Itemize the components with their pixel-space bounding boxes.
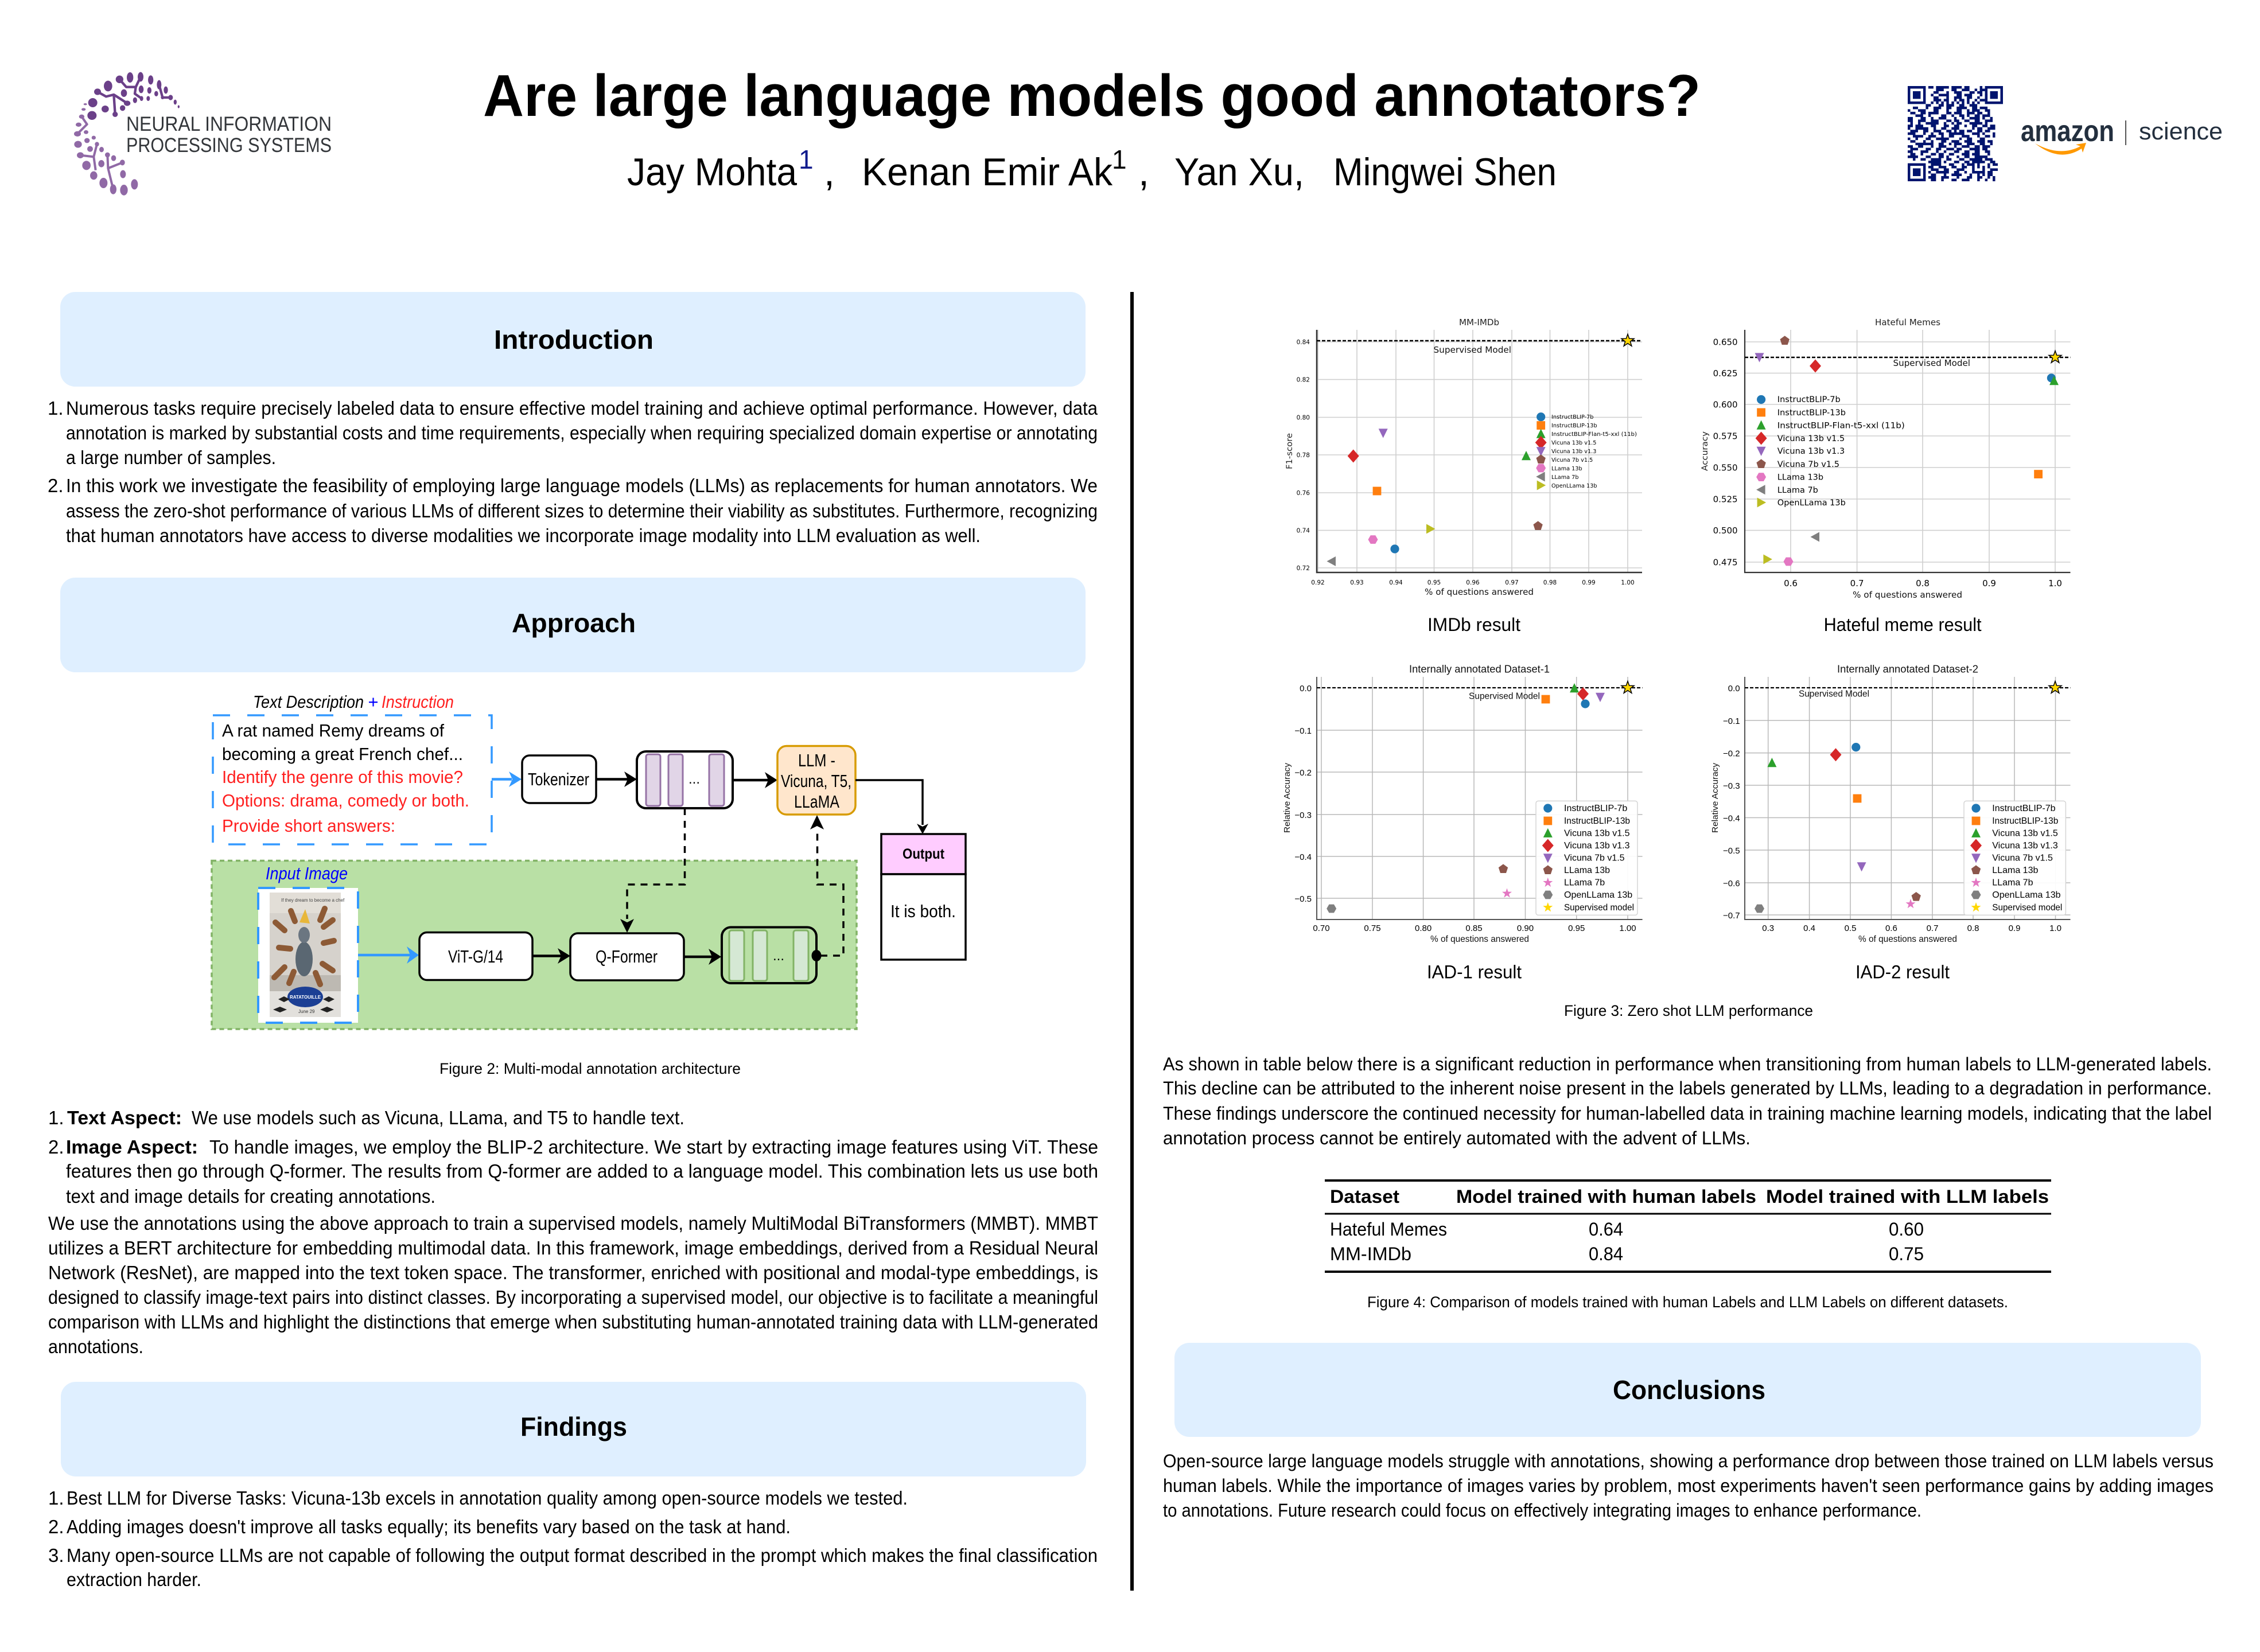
y tick labels: −0.7 <box>1723 911 1740 921</box>
dashed prompt box <box>213 715 492 844</box>
legend: InstructBLIP-13b <box>1992 816 2058 826</box>
input image: movie poster <box>258 888 358 1023</box>
x tick labels: 0.6 <box>1784 578 1798 589</box>
input image: movie poster: RATATOUILLE <box>290 994 321 1000</box>
y tick labels: 0.78 <box>1297 452 1310 459</box>
text block: supervised model paragraph <box>48 1213 1098 1357</box>
purple token embeddings: ... <box>688 772 700 787</box>
y tick labels: 0.500 <box>1713 525 1738 536</box>
data points <box>1327 334 1634 566</box>
axis labels: % of questions answered <box>1853 590 1962 600</box>
legend: InstructBLIP-13b <box>1777 408 1846 418</box>
x tick labels: 0.9 <box>2009 924 2020 933</box>
x tick labels: 0.4 <box>1803 924 1815 933</box>
text block: supervised model paragraph: We use the annotations using the above approach to train a supervised models, namely MultiModal BiTransformers (MMBT). MMBT <box>48 1213 1098 1234</box>
text block: introduction list: that human annotators have access to diverse modalities we incorporate image modality into LLM evaluation as well. <box>66 525 981 546</box>
y tick labels: 0.0 <box>1300 684 1312 693</box>
legend: Vicuna 13b v1.3 <box>1551 449 1596 455</box>
y tick labels: 0.475 <box>1713 558 1738 568</box>
text block: supervised model paragraph: annotations. <box>48 1336 143 1357</box>
authors: 1 <box>799 145 814 174</box>
text description heading: + <box>368 692 378 712</box>
arrow: ViT to Q-Former <box>532 948 570 964</box>
y tick labels: 0.76 <box>1297 490 1310 497</box>
x tick labels: 0.7 <box>1927 924 1938 933</box>
logo: amazon science: science <box>2139 118 2223 145</box>
supervised reference line: Supervised Model <box>1433 345 1511 355</box>
axis labels <box>1282 762 1529 944</box>
chart: MM-IMDb scatter <box>1285 317 1642 597</box>
table: human labels vs LLM labels: Hateful Memes <box>1330 1219 1447 1240</box>
x tick labels: 0.95 <box>1568 924 1585 933</box>
x tick labels: 0.6 <box>1885 924 1897 933</box>
legend <box>1964 801 2065 915</box>
logo wordmark: NEURAL INFORMATION <box>126 113 332 135</box>
authors: Jay Mohta <box>627 150 797 194</box>
output box: It is both. <box>890 901 956 921</box>
x tick labels: 0.8 <box>1967 924 1979 933</box>
table: human labels vs LLM labels: 0.60 <box>1889 1219 1924 1240</box>
legend: OpenLLama 13b <box>1992 890 2061 900</box>
y tick labels <box>1294 684 1312 904</box>
x tick labels: 0.95 <box>1427 579 1441 586</box>
axis labels <box>1701 431 1962 600</box>
output box <box>881 834 966 960</box>
legend <box>1756 395 1905 508</box>
x tick labels: 0.75 <box>1364 924 1381 933</box>
y tick labels: −0.4 <box>1723 813 1740 824</box>
axis labels: Relative Accuracy <box>1710 762 1720 833</box>
text block: introduction list: In this work we investigate the feasibility of employing large language models (LLMs) as replacements for human annotators. We <box>66 475 1098 496</box>
axes <box>1317 330 1642 572</box>
x tick labels <box>1313 924 1636 933</box>
x tick labels <box>1762 924 2061 933</box>
table: human labels vs LLM labels: Model trained with LLM labels <box>1766 1186 2049 1207</box>
x tick labels: 0.93 <box>1350 579 1364 586</box>
green image branch panel <box>212 860 857 1029</box>
legend <box>1535 412 1637 490</box>
Q-Former box: Q-Former <box>596 946 658 967</box>
output box: Output <box>903 846 945 862</box>
caption: figure 2: Figure 2: Multi-modal annotation architecture <box>439 1060 741 1077</box>
x tick labels: 1.0 <box>2049 924 2061 933</box>
caption: figure 3: Figure 3: Zero shot LLM performance <box>1564 1002 1813 1019</box>
legend: Vicuna 13b v1.3 <box>1564 841 1630 851</box>
y tick labels: 0.575 <box>1713 431 1738 442</box>
arrow: LLM to output <box>855 780 928 834</box>
Q-Former box <box>570 933 684 980</box>
heading: Approach <box>60 578 1086 672</box>
dashed arrow: image embeddings to LLM <box>810 815 843 961</box>
table: human labels vs LLM labels: 0.84 <box>1589 1244 1623 1264</box>
legend: Supervised model <box>1564 903 1634 913</box>
arrow: tokenizer to embeddings <box>596 772 637 787</box>
text block: findings list: Best LLM for Diverse Tasks: Vicuna-13b excels in annotation quality among open-source models we tested. <box>67 1487 908 1509</box>
x tick labels: 0.9 <box>1982 578 1996 589</box>
x tick labels: 0.97 <box>1505 579 1519 586</box>
text block: introduction list <box>48 398 1098 546</box>
chart title: Internally annotated Dataset-1 <box>1409 663 1550 675</box>
y tick labels: 0.72 <box>1297 565 1310 572</box>
heading: Approach: Approach <box>512 608 636 638</box>
y tick labels: 0.80 <box>1297 414 1310 421</box>
text block: findings list: Adding images doesn't improve all tasks equally; its benefits vary based on the task at hand. <box>67 1516 791 1537</box>
dashed prompt box: becoming a great French chef... <box>222 744 463 764</box>
y tick labels <box>1723 684 1740 921</box>
legend: InstructBLIP-7b <box>1551 414 1593 420</box>
arrow: embeddings to LLM <box>733 772 777 788</box>
axis labels: F1-score <box>1285 433 1294 469</box>
text block: approach list: 2. <box>48 1136 64 1158</box>
dashed arrow: tokens to Q-Former <box>620 808 685 933</box>
text block: approach list: We use models such as Vicuna, LLama, and T5 to handle text. <box>192 1107 684 1128</box>
x tick labels: 0.99 <box>1582 579 1596 586</box>
legend: LLama 7b <box>1992 878 2033 888</box>
text block: approach list: To handle images, we employ the BLIP-2 architecture. We start by extracting image features using ViT. These <box>209 1136 1098 1158</box>
chart title: Internally annotated Dataset-2 <box>1837 663 1978 675</box>
logo wordmark: PROCESSING SYSTEMS <box>126 134 332 157</box>
LLM box: Vicuna, T5, <box>781 771 851 791</box>
logo: amazon science <box>2021 115 2223 155</box>
x tick labels: 0.85 <box>1465 924 1483 933</box>
input image: movie poster: June 29 <box>298 1009 315 1014</box>
text block: introduction list: 1. <box>48 398 64 419</box>
y tick labels: −0.5 <box>1294 894 1312 904</box>
x tick labels <box>1311 579 1635 586</box>
text block: table discussion: This decline can be attributed to the inherent noise present in the labels generated by LLMs, leading to a degradation in performance. <box>1163 1078 2212 1098</box>
legend: InstructBLIP-7b <box>1992 804 2056 813</box>
legend: InstructBLIP-13b <box>1564 816 1630 826</box>
axes <box>1745 677 2070 919</box>
logo wordmark <box>126 113 332 157</box>
x tick labels: 0.98 <box>1543 579 1557 586</box>
grid lines <box>1317 677 1643 919</box>
legend: Vicuna 7b v1.5 <box>1777 460 1839 469</box>
legend: Vicuna 7b v1.5 <box>1992 854 2053 863</box>
arrow: Q-Former to image embeddings <box>684 949 721 965</box>
axis labels: Relative Accuracy <box>1282 762 1292 833</box>
y tick labels: −0.6 <box>1723 879 1740 889</box>
legend: Vicuna 7b v1.5 <box>1551 457 1593 463</box>
text block: supervised model paragraph: utilizes a BERT architecture for embedding multimodal data. In this framework, image embeddings, derived from a Residual Neural <box>48 1237 1098 1259</box>
logo: amazon science: amazon <box>2021 115 2114 148</box>
LLM box: LLaMA <box>794 792 839 812</box>
heading: Introduction: Introduction <box>494 325 654 354</box>
dashed prompt box: A rat named Remy dreams of <box>222 720 444 741</box>
y tick labels: −0.3 <box>1723 781 1740 791</box>
legend: InstructBLIP-7b <box>1777 395 1841 404</box>
text block: introduction list: Numerous tasks require precisely labeled data to ensure effective model training and achieve optimal performance. However, data <box>66 398 1098 419</box>
axis labels: % of questions answered <box>1430 934 1529 944</box>
axis labels: Accuracy <box>1701 431 1710 471</box>
authors <box>627 145 1557 194</box>
text block: findings list: 3. <box>48 1545 64 1566</box>
y tick labels: 0.74 <box>1297 528 1310 535</box>
text block: table discussion <box>1163 1054 2212 1148</box>
purple token embeddings <box>637 751 733 808</box>
input image label: Input Image <box>266 863 348 883</box>
dashed prompt box: Provide short answers: <box>222 816 395 836</box>
chart title: Hateful Memes <box>1875 317 1940 328</box>
legend: LLama 13b <box>1551 466 1582 472</box>
axis labels <box>1285 433 1534 597</box>
y tick labels: 0.600 <box>1713 399 1738 410</box>
x tick labels: 1.00 <box>1619 924 1636 933</box>
legend: OpenLLama 13b <box>1551 483 1597 489</box>
legend: Vicuna 13b v1.5 <box>1564 828 1630 839</box>
caption: figure 4: Figure 4: Comparison of models trained with human Labels and LLM Labels on different datasets. <box>1367 1293 2008 1311</box>
legend: LLama 13b <box>1992 866 2038 875</box>
x tick labels <box>1784 578 2062 589</box>
legend: InstructBLIP-Flan-t5-xxl (11b) <box>1777 421 1905 430</box>
table: human labels vs LLM labels: 0.64 <box>1589 1219 1623 1240</box>
grid lines <box>1745 330 2070 572</box>
text block: supervised model paragraph: Network (ResNet), are mapped into the text token space. The transformer, enriched with positional and modal-type embeddings, is <box>48 1262 1098 1283</box>
text block: conclusions: human labels. While the importance of images varies by problem, most experiments haven't seen performance gains by adding images <box>1163 1475 2214 1496</box>
text block: conclusions: to annotations. Future research could focus on effectively integrating images to enhance performance. <box>1163 1500 1921 1521</box>
legend: InstructBLIP-7b <box>1564 804 1627 813</box>
text block: table discussion: These findings underscore the continued necessity for human-labelled data in training machine learning models, indicating that the label <box>1163 1103 2212 1124</box>
chart: Internally annotated Dataset-2 scatter <box>1710 663 2070 944</box>
authors: , <box>1138 150 1149 194</box>
y tick labels: 0.625 <box>1713 368 1738 379</box>
text block: table discussion: annotation process cannot be entirely automated with the advent of LLMs. <box>1163 1128 1751 1148</box>
legend: InstructBLIP-Flan-t5-xxl (11b) <box>1551 431 1637 438</box>
legend: Vicuna 7b v1.5 <box>1564 854 1625 863</box>
text block: findings list: 2. <box>48 1516 64 1537</box>
y tick labels <box>1297 339 1310 572</box>
legend: LLama 13b <box>1564 866 1610 875</box>
caption: Hateful meme result: Hateful meme result <box>1824 614 1982 635</box>
supervised reference line: Supervised Model <box>1893 358 1970 368</box>
legend: LLama 7b <box>1777 486 1818 495</box>
ViT-G/14 box <box>419 933 532 980</box>
text block: approach list: text and image details for creating annotations. <box>66 1186 435 1207</box>
y tick labels: −0.1 <box>1294 726 1312 736</box>
y tick labels: 0.82 <box>1297 376 1310 383</box>
legend: Vicuna 13b v1.5 <box>1992 828 2058 839</box>
text block: approach list: 1. <box>48 1107 64 1128</box>
authors: Yan Xu, <box>1174 150 1304 194</box>
text block: findings list <box>48 1487 1098 1590</box>
x tick labels: 0.94 <box>1389 579 1403 586</box>
heading: Findings: Findings <box>520 1412 627 1441</box>
tokenizer box: Tokenizer <box>528 769 589 789</box>
figure 2: multi-modal annotation architecture diagram <box>212 692 966 1029</box>
y tick labels: −0.2 <box>1723 749 1740 759</box>
x tick labels: 0.8 <box>1916 578 1930 589</box>
chart: Hateful Memes scatter <box>1701 317 2070 600</box>
y tick labels: −0.1 <box>1723 716 1740 726</box>
text block: findings list: extraction harder. <box>67 1569 201 1590</box>
grid lines <box>1745 677 2070 919</box>
legend <box>1536 801 1637 915</box>
legend: OpenLLama 13b <box>1564 890 1632 900</box>
icon: NeurIPS dot swirl <box>74 72 180 196</box>
LLM box: LLM - <box>798 750 835 770</box>
axis labels: % of questions answered <box>1858 934 1957 944</box>
x tick labels: 0.3 <box>1762 924 1774 933</box>
y tick labels <box>1713 337 1738 568</box>
text block: introduction list: a large number of samples. <box>66 447 276 468</box>
LLM box <box>777 746 855 815</box>
x tick labels: 0.70 <box>1313 924 1330 933</box>
y tick labels: 0.84 <box>1297 339 1310 346</box>
QR code <box>1908 86 2003 181</box>
x tick labels: 0.92 <box>1311 579 1325 586</box>
text block: introduction list: 2. <box>48 475 64 496</box>
axes <box>1745 330 2070 572</box>
table: human labels vs LLM labels <box>1325 1179 2051 1273</box>
legend: Supervised model <box>1992 903 2062 913</box>
x tick labels: 1.0 <box>2048 578 2062 589</box>
green image embeddings: ... <box>773 948 784 964</box>
logo: Neural Information Processing Systems <box>74 72 332 196</box>
text description heading: Instruction <box>382 692 454 712</box>
authors: Kenan Emir Ak <box>862 150 1113 194</box>
legend: LLama 7b <box>1551 474 1579 481</box>
y tick labels: 0.650 <box>1713 337 1738 348</box>
supervised reference line: Supervised Model <box>1469 692 1540 701</box>
axis labels <box>1710 762 1957 944</box>
y tick labels: −0.4 <box>1294 852 1312 862</box>
title: Are large language models good annotators? <box>483 63 1701 128</box>
text block: introduction list: annotation is marked by substantial costs and time requirements, especially when requiring specialized domain expertise or annotating <box>66 422 1098 443</box>
axes <box>1317 677 1643 919</box>
x tick labels: 0.7 <box>1850 578 1864 589</box>
x tick labels: 0.90 <box>1517 924 1534 933</box>
legend: OpenLLama 13b <box>1777 498 1846 508</box>
caption: IAD-1 result: IAD-1 result <box>1427 962 1522 983</box>
text block: introduction list: assess the zero-shot performance of various LLMs of different sizes to determine their viability as substitutes. Furthermore, recognizing <box>66 500 1098 521</box>
text block: supervised model paragraph: designed to classify image-text pairs into distinct classes. By incorporating a supervised model, our objective is to facilitate a meaningful <box>48 1287 1098 1308</box>
text block: findings list: 1. <box>48 1487 64 1509</box>
text block: approach list: Image Aspect: <box>66 1136 198 1158</box>
legend: LLama 13b <box>1777 473 1823 482</box>
authors: , <box>824 150 835 194</box>
green image embeddings <box>722 927 816 983</box>
caption: IMDb result: IMDb result <box>1427 614 1520 635</box>
legend: Vicuna 13b v1.3 <box>1777 447 1845 456</box>
text block: conclusions: Open-source large language models struggle with annotations, showing a performance drop between those trained on LLM labels versus <box>1163 1451 2214 1471</box>
legend: InstructBLIP-13b <box>1551 423 1597 429</box>
text description heading <box>253 692 454 712</box>
legend: LLama 7b <box>1564 878 1605 888</box>
y tick labels: 0.525 <box>1713 494 1738 505</box>
table: human labels vs LLM labels: Dataset <box>1330 1186 1399 1207</box>
heading: Introduction <box>60 292 1086 387</box>
text block: approach list: Text Aspect: <box>67 1107 182 1128</box>
text block: findings list: Many open-source LLMs are not capable of following the output format described in the prompt which makes the final classification <box>67 1545 1098 1566</box>
y tick labels: −0.2 <box>1294 768 1312 778</box>
x tick labels: 0.80 <box>1415 924 1432 933</box>
text block: conclusions <box>1163 1451 2214 1521</box>
dashed prompt box: Identify the genre of this movie? <box>222 767 463 787</box>
text block: approach list: features then go through Q-former. The results from Q-former are added to a language model. This combination lets us use both <box>66 1160 1098 1182</box>
table: human labels vs LLM labels: MM-IMDb <box>1330 1244 1411 1264</box>
text block: approach list <box>48 1107 1098 1207</box>
authors: Mingwei Shen <box>1333 150 1557 194</box>
divider: column separator <box>1130 292 1134 1591</box>
axis labels: % of questions answered <box>1425 587 1534 597</box>
chart title: MM-IMDb <box>1459 317 1499 328</box>
tokenizer box <box>522 755 596 803</box>
heading: Conclusions: Conclusions <box>1613 1375 1765 1405</box>
ViT-G/14 box: ViT-G/14 <box>448 946 503 967</box>
arrow: image to ViT <box>358 946 419 964</box>
table: human labels vs LLM labels: Model trained with human labels <box>1456 1186 1756 1207</box>
grid lines <box>1317 330 1642 572</box>
arrow: prompt to tokenizer <box>492 772 522 787</box>
legend: Vicuna 13b v1.5 <box>1777 434 1845 443</box>
x tick labels: 0.5 <box>1845 924 1856 933</box>
text block: supervised model paragraph: comparison with LLMs and highlight the distinctions that emerge when substituting human-annotated training data with LLM-generated <box>48 1311 1098 1332</box>
x tick labels: 1.00 <box>1621 579 1635 586</box>
authors: 1 <box>1112 145 1127 174</box>
dashed prompt box: Options: drama, comedy or both. <box>222 790 469 811</box>
heading: Findings <box>61 1382 1086 1476</box>
y tick labels: 0.550 <box>1713 462 1738 473</box>
input image: movie poster: If they dream to become a chef <box>281 898 345 903</box>
supervised reference line: Supervised Model <box>1799 689 1869 699</box>
text block: table discussion: As shown in table below there is a significant reduction in performance when transitioning from human labels to LLM-generated labels. <box>1163 1054 2212 1074</box>
y tick labels: 0.0 <box>1728 684 1740 693</box>
chart: Internally annotated Dataset-1 scatter <box>1282 663 1643 944</box>
legend: Vicuna 13b v1.3 <box>1992 841 2058 851</box>
x tick labels: 0.96 <box>1466 579 1480 586</box>
text description heading: Text Description <box>253 692 364 712</box>
data points <box>1755 336 2061 566</box>
caption: IAD-2 result: IAD-2 result <box>1856 962 1950 983</box>
heading: Conclusions <box>1174 1343 2201 1437</box>
y tick labels: −0.5 <box>1723 846 1740 856</box>
data points <box>1327 681 1634 913</box>
table: human labels vs LLM labels: 0.75 <box>1889 1244 1924 1264</box>
data points <box>1755 681 2061 913</box>
y tick labels: −0.3 <box>1294 811 1312 820</box>
legend: Vicuna 13b v1.5 <box>1551 440 1596 446</box>
